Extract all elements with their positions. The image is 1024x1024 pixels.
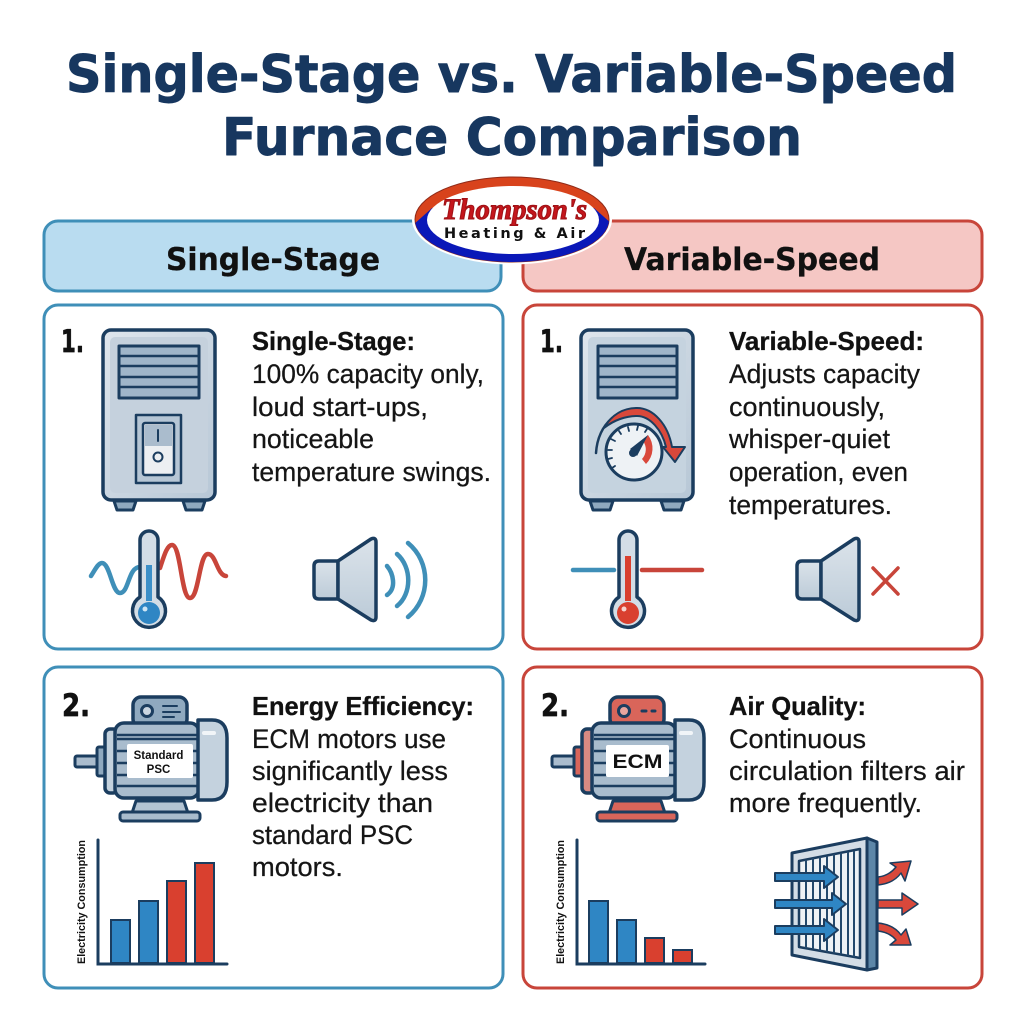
text: single-stage description: noticeable: [252, 424, 374, 454]
panel: energy efficiency: [44, 667, 503, 988]
icon: furnace with on/off switch: [103, 330, 215, 510]
number 2: 2.: [541, 688, 569, 724]
text: variable-speed description: whisper-quiet: [728, 424, 890, 454]
title: Single-Stage vs. Variable-Speed: [66, 45, 957, 105]
bar chart: PSC electricity consumption: Electricity Consumption: [76, 840, 88, 964]
text: air quality description: circulation filters air: [729, 756, 965, 786]
icon: thermometer with steady temperature: [573, 531, 702, 627]
text: single-stage description: 100% capacity only,: [252, 359, 484, 389]
text: single-stage description: [252, 326, 491, 487]
number 1: 1.: [61, 324, 84, 360]
text: variable-speed description: temperatures.: [729, 490, 892, 520]
text: variable-speed description: [728, 326, 924, 520]
text: energy efficiency description: ECM motors use: [252, 724, 446, 754]
text: single-stage description: Single-Stage:: [252, 326, 415, 356]
title: [66, 45, 957, 168]
title: Furnace Comparison: [222, 108, 802, 168]
text: energy efficiency description: Energy Efficiency:: [252, 691, 474, 721]
text: energy efficiency description: [252, 691, 474, 882]
header: Variable-Speed: Variable-Speed: [624, 242, 880, 278]
icon: thermometer with temperature swings: [91, 531, 226, 627]
icon: standard PSC motor: Standard: [134, 750, 183, 762]
header: Single-Stage: [44, 221, 501, 291]
panel: air quality: [523, 667, 982, 988]
logo: Thompson's Heating & Air: Heating & Air: [444, 226, 586, 242]
text: single-stage description: temperature swings.: [252, 457, 491, 487]
logo: Thompson's Heating & Air: [412, 176, 612, 264]
icon: loud speaker: [314, 538, 425, 621]
number 2: 2.: [62, 688, 90, 724]
icon: ECM motor: [552, 697, 704, 821]
text: air quality description: more frequently.: [729, 788, 922, 818]
text: energy efficiency description: standard PSC: [252, 820, 413, 850]
text: single-stage description: loud start-ups,: [252, 392, 428, 422]
icon: standard PSC motor: PSC: [147, 764, 170, 776]
bar chart: ECM electricity consumption: Electricity Consumption: [555, 840, 567, 964]
panel: single-stage operation: [44, 305, 503, 649]
number 1: 1.: [540, 324, 563, 360]
icon: standard PSC motor: [75, 697, 227, 821]
text: air quality description: Air Quality:: [729, 691, 866, 721]
logo: Thompson's Heating & Air: Thompson's: [442, 193, 587, 226]
icon: air filter with airflow arrows: [775, 838, 918, 970]
text: energy efficiency description: significantly less: [252, 756, 448, 786]
text: variable-speed description: Variable-Speed:: [729, 326, 924, 356]
text: variable-speed description: Adjusts capacity: [729, 359, 920, 389]
panel: variable-speed operation: [523, 305, 982, 649]
text: air quality description: [729, 691, 965, 818]
header: Variable-Speed: [523, 221, 982, 291]
bar chart: ECM electricity consumption: [555, 840, 705, 964]
text: variable-speed description: operation, even: [729, 457, 908, 487]
text: energy efficiency description: motors.: [252, 852, 343, 882]
icon: ECM motor: ECM: [612, 752, 662, 773]
icon: furnace with modulating gauge: [581, 330, 693, 510]
header: Single-Stage: Single-Stage: [166, 242, 380, 278]
text: air quality description: Continuous: [729, 724, 866, 754]
bar chart: PSC electricity consumption: [76, 840, 227, 964]
text: energy efficiency description: electricity than: [252, 788, 433, 818]
icon: quiet speaker: [797, 538, 898, 621]
text: variable-speed description: continuously,: [729, 392, 885, 422]
